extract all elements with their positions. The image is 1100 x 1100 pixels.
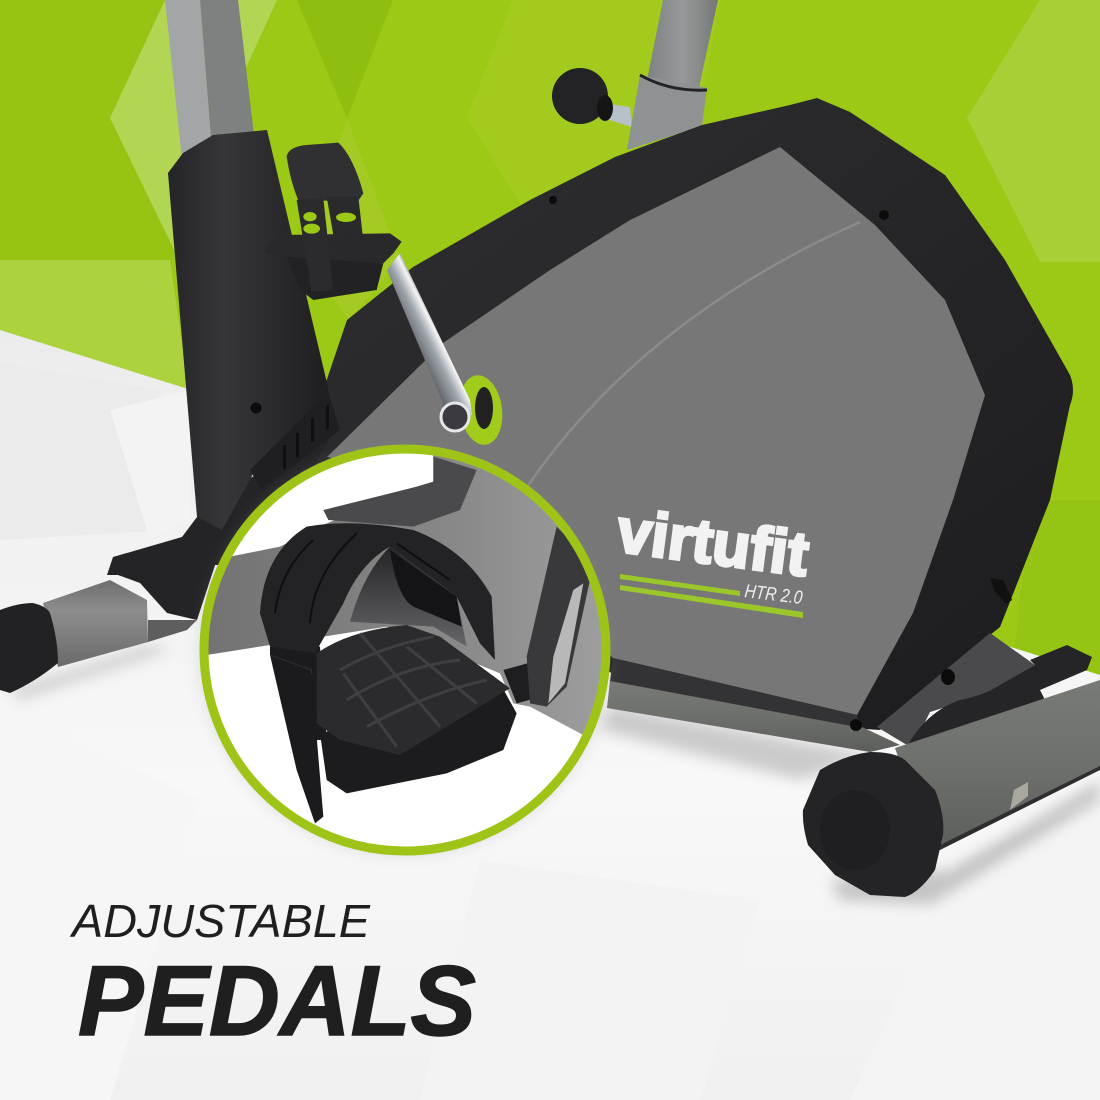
pedal underside — [320, 683, 517, 793]
heading — [69, 895, 476, 1056]
crank end cap — [441, 403, 469, 431]
black fill between plate and platform — [270, 647, 327, 740]
crank arm — [387, 253, 507, 448]
platform tread grid — [340, 633, 487, 747]
strap inner dark face — [390, 550, 462, 627]
panel seam — [525, 222, 860, 490]
rear stabiliser foot — [877, 633, 1092, 750]
logo: virtufit HTR 2.0: virtufit — [613, 496, 813, 590]
white faceted floor — [0, 330, 1100, 1100]
lower panel strip and frame bar — [607, 658, 900, 752]
logo: virtufit HTR 2.0: HTR 2.0 — [743, 581, 804, 609]
rear stabiliser tube — [895, 680, 1100, 851]
heading: PEDALS — [78, 945, 476, 1056]
strap interior — [350, 547, 467, 647]
side switch — [990, 578, 1012, 604]
grey tube and panel behind pedal — [208, 456, 602, 734]
dark shoulder behind pedal — [323, 457, 477, 527]
pedal platform — [317, 625, 510, 755]
upright black column — [168, 130, 340, 565]
housing black detail holes — [549, 196, 889, 731]
vent slots — [283, 405, 329, 469]
green background — [0, 0, 1100, 700]
base foot left — [0, 517, 220, 693]
green crank hub — [455, 372, 507, 448]
side plate with slots — [270, 655, 323, 823]
saddle post and knob — [548, 0, 718, 150]
upper pedal — [265, 143, 402, 300]
grey side panel — [327, 147, 985, 715]
strap ridge lines — [275, 533, 450, 623]
main housing black shell — [250, 98, 1073, 730]
seat post left upright — [165, 0, 254, 160]
soft floor shadows — [10, 645, 1100, 905]
chrome crank close-up — [527, 527, 590, 707]
tube bolt — [1010, 782, 1028, 810]
heading: ADJUSTABLE — [69, 895, 371, 947]
zoom lens: pedal close-up — [199, 440, 620, 856]
tube end cap — [803, 752, 943, 897]
pedal axle — [503, 663, 530, 704]
toe strap — [260, 523, 495, 660]
